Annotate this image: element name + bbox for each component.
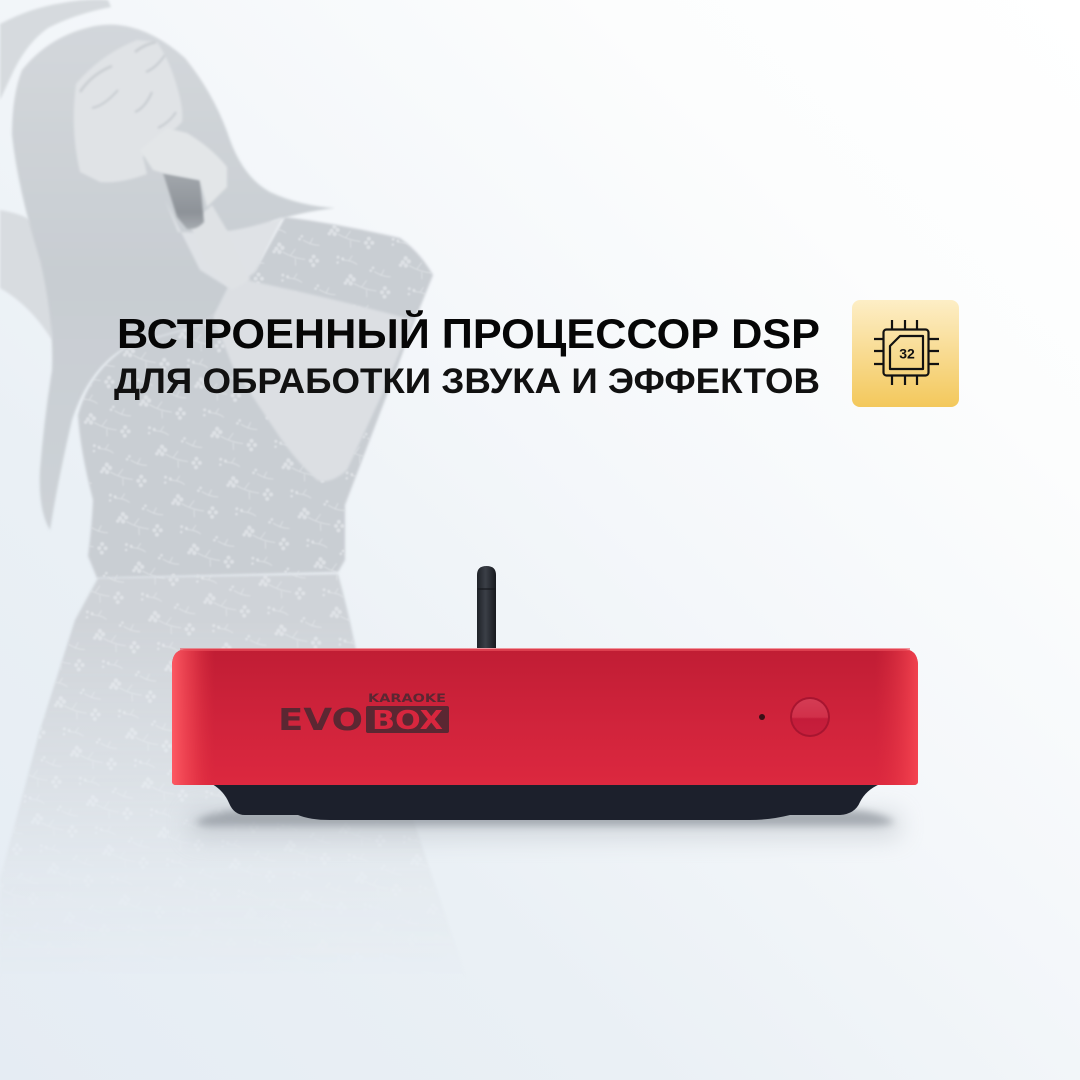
woman: fingers on microphone bbox=[140, 128, 227, 207]
logo: BOX plate bbox=[366, 706, 449, 733]
woman: upper arm bbox=[0, 210, 55, 340]
icon tile bbox=[852, 300, 959, 407]
device floor shadow bbox=[190, 810, 900, 838]
logo: EVOBOX KARAOKE bbox=[278, 691, 449, 738]
photo: singing woman in grey bbox=[0, 0, 434, 848]
woman: long hair bbox=[12, 25, 335, 530]
logo: BOX: BOX bbox=[372, 706, 443, 736]
woman: face bbox=[74, 40, 182, 182]
woman: closed eyes, nose and lips bbox=[80, 42, 176, 128]
heading bbox=[114, 309, 820, 401]
power button bbox=[790, 697, 830, 737]
woman: dress bodice and sleeve bbox=[78, 217, 433, 578]
woman: forearm below hand bbox=[192, 206, 250, 280]
device red body bbox=[172, 648, 918, 785]
chip outline and pins bbox=[874, 320, 939, 385]
logo: EVO: EVO bbox=[278, 703, 363, 738]
heading line 2: ДЛЯ ОБРАБОТКИ ЗВУКА И ЭФФЕКТОВ bbox=[114, 362, 820, 401]
woman: skirt bbox=[12, 574, 356, 848]
icon: 32-bit processor chip badge bbox=[852, 300, 959, 407]
woman: neck and chest bbox=[172, 216, 280, 287]
device base bbox=[212, 784, 880, 820]
heading line 1: ВСТРОЕННЫЙ ПРОЦЕССОР DSP bbox=[117, 309, 820, 357]
woman: bent arm bbox=[213, 277, 413, 481]
woman: dress floral print top bbox=[78, 217, 433, 578]
indicator LED bbox=[759, 714, 765, 720]
woman: microphone bbox=[163, 173, 204, 229]
chip label: 32 bbox=[899, 346, 915, 362]
logo: KARAOKE: KARAOKE bbox=[368, 691, 446, 705]
product: Evobox karaoke device bbox=[172, 566, 918, 838]
woman: raised arm and hand bbox=[0, 0, 111, 100]
antenna bbox=[477, 566, 496, 648]
woman: skirt floral print bbox=[40, 576, 352, 769]
